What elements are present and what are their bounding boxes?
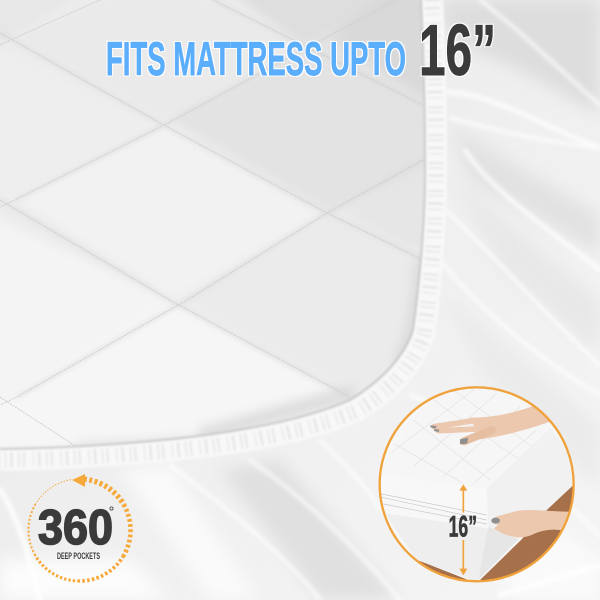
badge: 360 deep pockets xyxy=(28,474,131,581)
title: 16 inch figure: 16” xyxy=(419,11,496,91)
mattress lower front xyxy=(385,513,488,582)
progress ring xyxy=(28,479,131,581)
degree mark xyxy=(110,507,113,510)
mattress top surface xyxy=(377,387,557,488)
inset orange ring xyxy=(380,387,574,581)
ring arrowhead xyxy=(72,474,85,487)
thumbnail xyxy=(491,518,500,524)
quilt seam shadows xyxy=(20,124,326,396)
height arrow xyxy=(459,484,467,575)
fingernails xyxy=(430,425,468,444)
elastic hem xyxy=(0,0,436,460)
quilt stitched seams xyxy=(0,0,423,447)
inset 16 inch label: 16” xyxy=(449,510,477,543)
quilt shading near hem xyxy=(75,260,423,447)
elastic folds xyxy=(382,494,487,524)
quilted lines inset xyxy=(390,390,537,483)
lower hand xyxy=(491,510,570,537)
quilt diamond panels xyxy=(0,0,440,450)
inset photo: hands measuring mattress xyxy=(378,386,575,582)
mattress right side xyxy=(518,446,572,510)
wood bed frame xyxy=(480,486,572,580)
quilted mattress top xyxy=(0,0,424,446)
wood strip left xyxy=(418,560,468,580)
mattress front band xyxy=(377,473,488,522)
360 number: 360 xyxy=(38,501,113,555)
upper hand xyxy=(430,406,550,444)
mattress lower right xyxy=(478,527,518,580)
deep pockets label: DEEP POCKETS xyxy=(57,551,100,562)
